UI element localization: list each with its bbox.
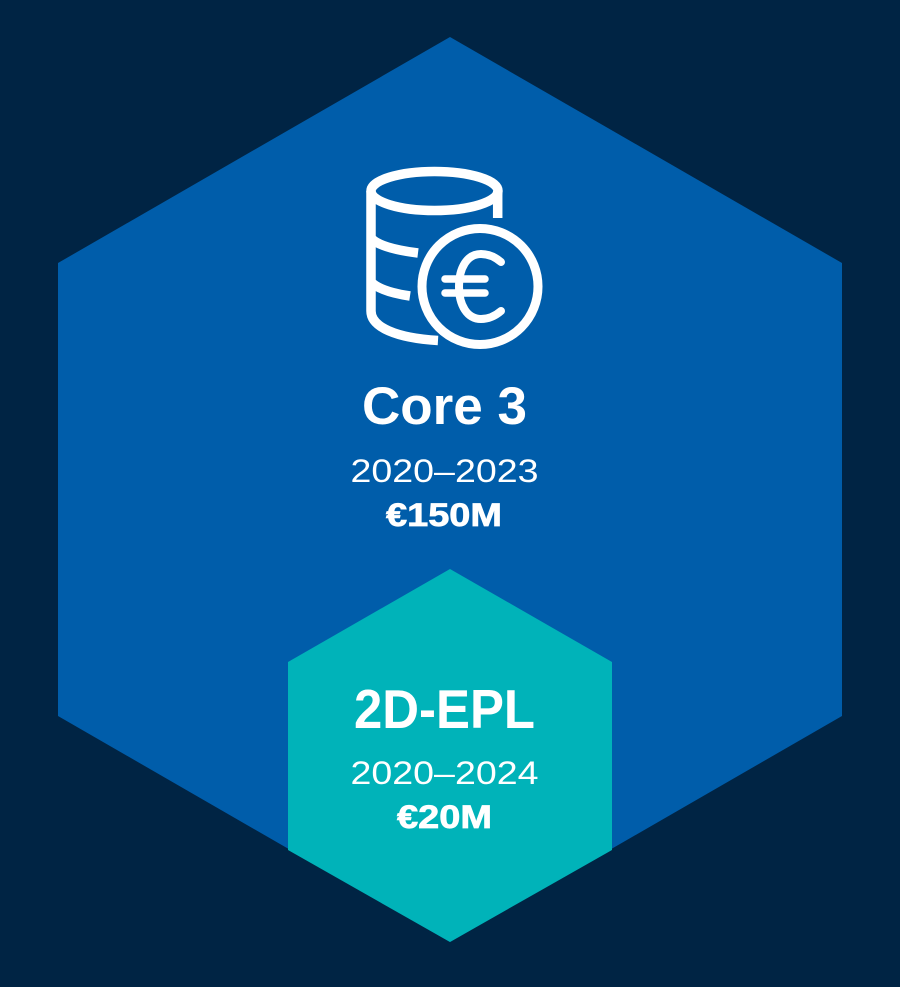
text: Core 3 budget: €150M — [386, 497, 502, 533]
heading: 2D-EPL: 2D-EPL — [354, 678, 535, 740]
text: 2D-EPL years: 2020–2024 — [350, 755, 538, 791]
panel: 2D-EPL small hexagon — [288, 569, 612, 942]
icon: coin stack with euro coin — [371, 172, 538, 344]
panel: Core 3 large hexagon — [58, 37, 842, 942]
text: Core 3 years: 2020–2023 — [350, 453, 538, 489]
heading: Core 3: Core 3 — [362, 377, 527, 436]
text: 2D-EPL budget: €20M — [397, 799, 492, 835]
